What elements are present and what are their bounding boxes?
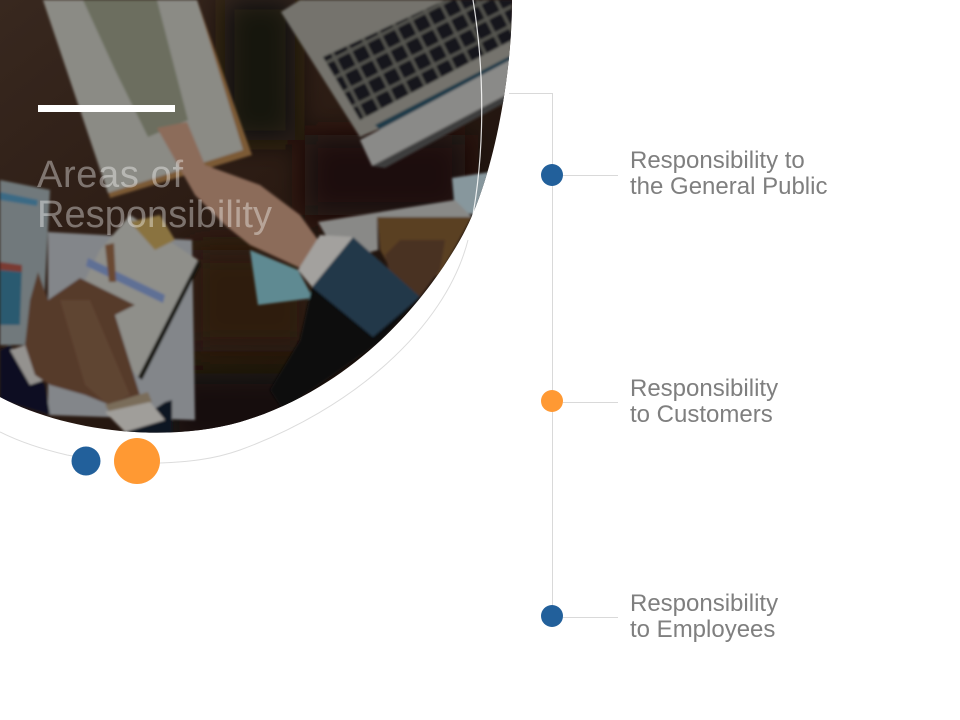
- item: employees: [541, 590, 778, 643]
- photo: business handshake on desk: [0, 0, 520, 445]
- timeline connector: [509, 94, 552, 617]
- item: customers: [541, 375, 778, 428]
- item: general public: the General Public: [630, 173, 827, 200]
- item: customers: to Customers: [630, 401, 773, 428]
- item: customers: Responsibility: [630, 375, 778, 402]
- item: general public: [541, 147, 827, 200]
- white bar accent: [38, 105, 175, 112]
- slide canvas: [0, 0, 827, 642]
- item: general public: Responsibility to: [630, 147, 805, 174]
- title: Areas of: [37, 154, 183, 196]
- thin arc around photo: [0, 0, 482, 463]
- item: employees: to Employees: [630, 616, 775, 643]
- title: Responsibility: [37, 194, 272, 236]
- decorative dots below photo: [72, 438, 160, 484]
- item: employees: Responsibility: [630, 590, 778, 617]
